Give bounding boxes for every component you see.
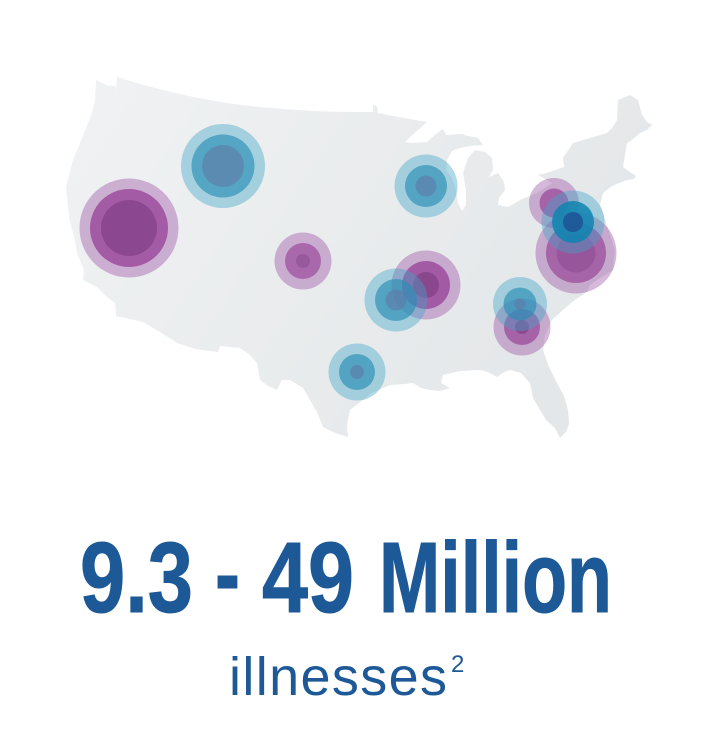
headline figure: Million [379, 522, 612, 634]
bubble: Colorado [274, 232, 332, 290]
bubble: Texas [328, 344, 386, 400]
footnote marker: 2 [451, 651, 464, 678]
bubble: Idaho [181, 124, 265, 208]
bubble: Pennsylvania [529, 178, 579, 228]
bubble: Georgia purple [494, 298, 550, 356]
bubble: North Carolina [536, 212, 616, 294]
subheading: illnesses [229, 647, 447, 707]
bubble: Missouri [392, 250, 460, 320]
bubble: Arkansas [364, 268, 428, 332]
headline figure [80, 518, 612, 634]
headline figure: 49 [262, 522, 354, 634]
bubble: Wisconsin [394, 154, 458, 218]
map of the United States [66, 77, 652, 438]
headline figure: - [215, 518, 240, 630]
bubble: Maryland [542, 190, 604, 254]
bubble: California [80, 178, 178, 278]
bubble: Georgia blue [493, 277, 547, 331]
headline figure: 9.3 [80, 522, 193, 634]
